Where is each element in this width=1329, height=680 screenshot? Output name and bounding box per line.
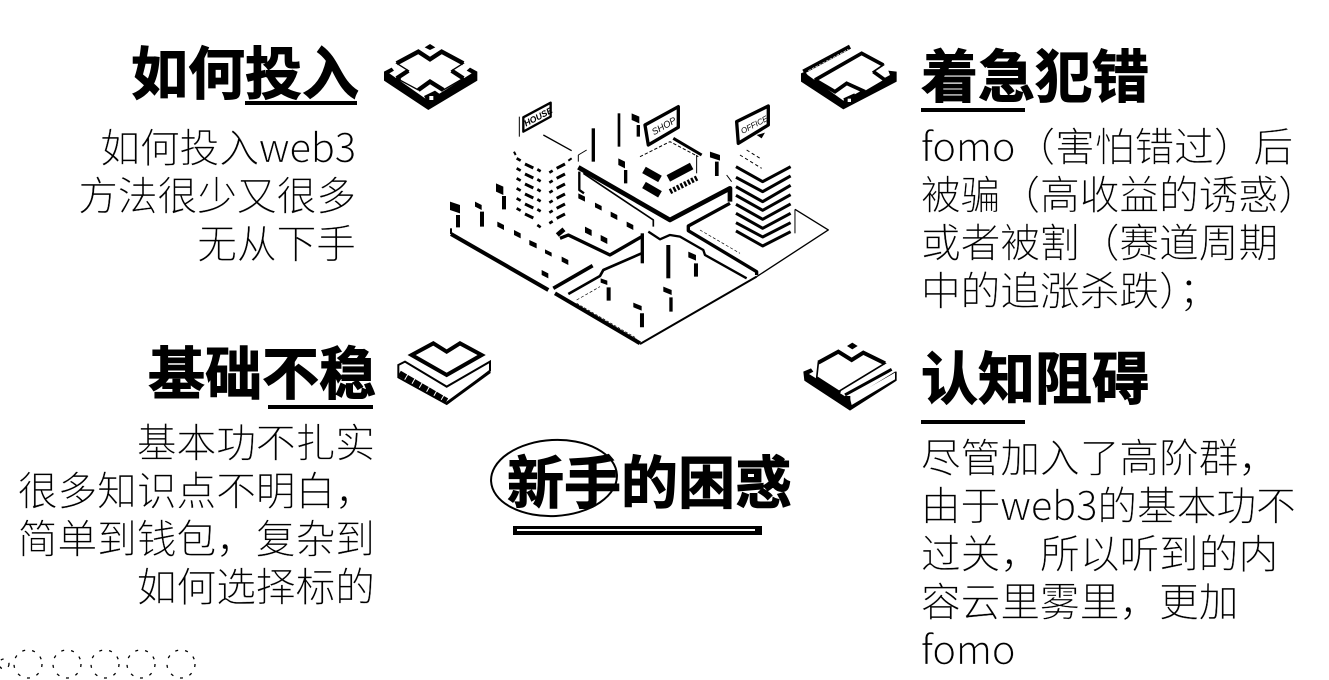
office building [736, 150, 791, 246]
title bar [513, 526, 762, 535]
text block: 认知阻碍: 尽管加入了高阶群， [921, 427, 1278, 484]
text block: 着急犯错: fomo（害怕错过）后 [921, 116, 1293, 173]
text block: 基础不稳: 如何选择标的 [137, 556, 375, 613]
text block: 基础不稳: 很多知识点不明白， [18, 460, 375, 517]
text block: 着急犯错: 被骗（高收益的诱惑） [921, 164, 1318, 221]
text block: 如何投入: 方法很少又很多 [78, 165, 356, 222]
sign: OFFICE [737, 106, 770, 143]
title underline: 基础不稳 [268, 405, 373, 409]
decorative dotted circles [0, 650, 195, 678]
text block: 如何投入: 如何投入web3 [100, 117, 356, 174]
title underline: 如何投入 [245, 101, 357, 105]
text block: 认知阻碍: fomo [921, 619, 1015, 676]
sign: SHOP [645, 107, 679, 145]
text block: 认知阻碍: 由于web3的基本功不 [921, 475, 1296, 532]
heading: 基础不稳: 基础不稳 [148, 343, 376, 407]
text block: 基础不稳 [18, 412, 375, 613]
sign: HOUSE [519, 103, 554, 137]
heading: 认知阻碍: 认知阻碍 [921, 348, 1149, 412]
title ellipse [489, 437, 619, 519]
icon: top-notch tile [803, 343, 897, 411]
icon: left-notch tile [801, 47, 897, 109]
text block: 认知阻碍: 过关，所以听到的内 [921, 523, 1278, 580]
trees [450, 113, 720, 327]
heading: 着急犯错: 着急犯错 [921, 46, 1149, 110]
sign: OFFICE: OFFICE [739, 114, 770, 136]
text block: 如何投入: 无从下手 [197, 213, 356, 270]
icon: cross-shaped tile [384, 44, 477, 110]
illustration: isometric city [450, 103, 828, 344]
sign: HOUSE: HOUSE [522, 105, 554, 128]
title underline: 认知阻碍 [921, 420, 1025, 424]
street poles [593, 113, 668, 278]
text block: 着急犯错: 中的追涨杀跌）； [921, 260, 1219, 317]
platform edges [451, 209, 828, 344]
text block: 如何投入 [78, 117, 356, 270]
title underline: 着急犯错 [921, 108, 1025, 112]
icon: stacked tile [398, 343, 490, 404]
text block: 认知阻碍: 容云里雾里，更加 [921, 571, 1238, 628]
main title: 新手的困惑: 新手的困惑 [507, 452, 792, 516]
text block: 基础不稳: 简单到钱包，复杂到 [18, 508, 375, 565]
heading: 如何投入: 如何投入 [131, 43, 359, 107]
sign: SHOP: SHOP [650, 115, 679, 137]
text block: 着急犯错 [921, 116, 1318, 317]
roads [553, 167, 757, 300]
text block: 基础不稳: 基本功不扎实 [137, 412, 375, 469]
shop building [578, 138, 732, 194]
house building [514, 135, 572, 235]
text block: 认知阻碍 [921, 427, 1296, 676]
text block: 着急犯错: 或者被割（赛道周期 [921, 212, 1278, 269]
